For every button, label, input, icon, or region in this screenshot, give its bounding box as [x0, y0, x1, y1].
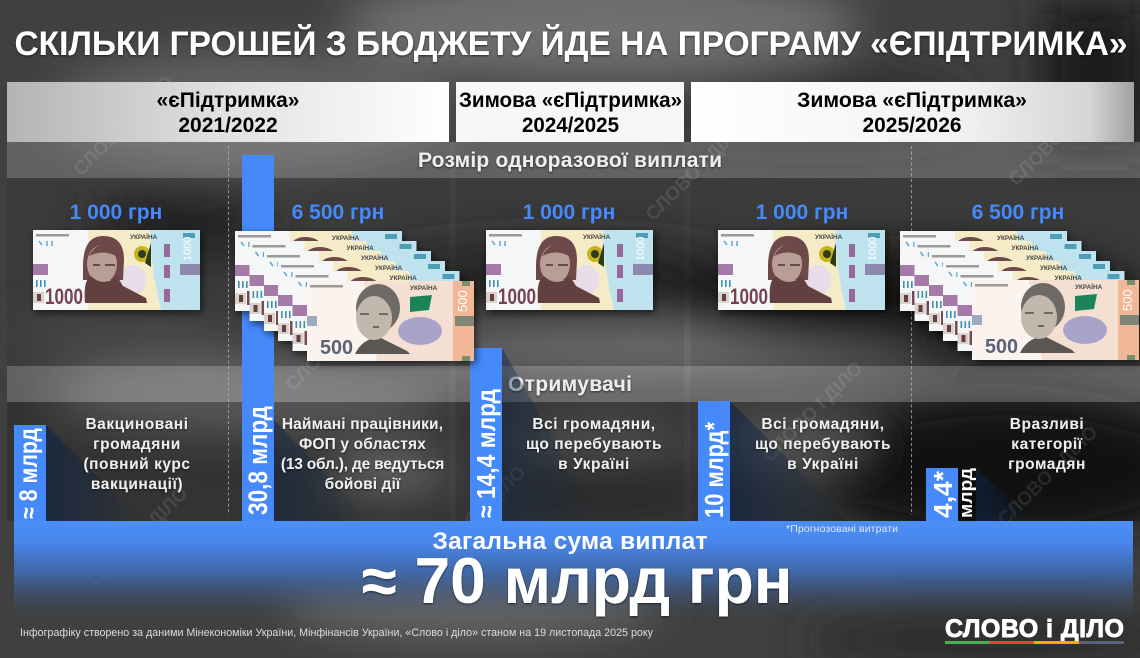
banknote: 1000 (2021): 1000	[182, 237, 194, 261]
recipients text: employees: бойові дії	[325, 476, 401, 493]
bar: 4,4 млрд	[926, 467, 976, 522]
banknote stack: 6500 (2021): УКРАЇНА	[346, 244, 374, 252]
band label: payment size: Розмір одноразової виплати	[418, 149, 722, 172]
recipients text: employees: (13 обл.), де ведуться	[281, 456, 444, 473]
banknote: 1000 (2025): УКРАЇНА	[815, 233, 843, 241]
bar: 10 млрд: 10 млрд*	[699, 421, 729, 518]
recipients text: vulnerable: Вразливі	[1010, 416, 1084, 433]
bar: 14,4 млрд: ≈ 14,4 млрд	[471, 389, 501, 518]
banknote: 1000 (2025)	[718, 230, 885, 310]
banknote: 1000 (2021): УКРАЇНА	[130, 233, 158, 241]
watermarks	[70, 72, 1113, 591]
banknote: 1000 (2021)	[33, 230, 200, 310]
watermarks: СЛОВО І ДІЛО	[642, 117, 750, 225]
banknote stack: 6500 (2025)	[900, 231, 1139, 360]
recipients text: vulnerable: категорії	[1011, 436, 1083, 453]
recipients text: employees: ФОП у областях	[299, 436, 426, 453]
watermarks: СЛОВО І ДІЛО	[1005, 82, 1113, 190]
banknote stack: 6500 (2025): УКРАЇНА	[1054, 274, 1082, 282]
watermarks: СЛОВО І ДІЛО	[422, 462, 530, 570]
header: 2021/2022	[7, 82, 449, 142]
banknote: 1000 (2024): 1000	[498, 284, 536, 309]
bar: 8 млрд: ≈ 8 млрд	[15, 428, 43, 519]
banknote stack: 6500 (2021): 500	[320, 337, 353, 359]
watermarks: СЛОВО І ДІЛО	[282, 287, 390, 395]
recipients text: vaccinated: громадяни	[93, 436, 181, 453]
banknote stack: 6500 (2025): 500	[1120, 289, 1135, 311]
banknote stack: 6500 (2021): 500	[455, 290, 470, 312]
logo: СЛОВО і ДІЛО	[945, 615, 1124, 643]
amount labels	[70, 201, 1064, 224]
banknote stack: 6500 (2021): УКРАЇНА	[390, 274, 417, 282]
recipients text: all citizens 2024: в Україні	[558, 456, 630, 473]
amount labels: 1 000 грн	[70, 201, 162, 224]
banknote: 1000 (2025): 1000	[867, 237, 879, 261]
header: 2025/2026: 2025/2026	[862, 114, 962, 137]
header: 2024/2025: Зимова «єПідтримка»	[459, 89, 682, 112]
band label: recipients: Отримувачі	[508, 373, 632, 396]
header: 2024/2025: 2024/2025	[522, 114, 619, 137]
banknote stack: 6500 (2025): УКРАЇНА	[1012, 244, 1039, 252]
total value: ≈ 70 млрд грн	[362, 544, 792, 617]
recipients text: vaccinated: вакцинації)	[91, 476, 183, 493]
recipients text: all citizens 2025: в Україні	[787, 456, 859, 473]
bar: 30,8 млрд: 30,8 млрд	[243, 406, 273, 515]
bar: 4,4 млрд: млрд	[956, 467, 976, 518]
recipients text: all citizens 2024: Всі громадяни,	[532, 416, 656, 433]
total label: Загальна сума виплат	[432, 528, 708, 555]
header: 2021/2022: 2021/2022	[178, 114, 278, 137]
banknote stack: 6500 (2025): УКРАЇНА	[1040, 264, 1068, 272]
banknote: 1000 (2024)	[486, 230, 653, 310]
bar: 4,4 млрд: 4,4*	[928, 470, 958, 518]
banknote stack: 6500 (2021): УКРАЇНА	[332, 234, 360, 242]
recipients text: employees: Наймані працівники,	[282, 416, 443, 433]
recipients text: vaccinated	[83, 416, 191, 493]
watermarks: СЛОВО І ДІЛО	[994, 422, 1102, 530]
recipients text: vaccinated: Вакциновані	[85, 416, 189, 433]
recipients text: all citizens 2024: що перебувають	[526, 436, 662, 453]
banknote stack: 6500 (2025): УКРАЇНА	[997, 234, 1025, 242]
banknote: 1000 (2024): УКРАЇНА	[583, 233, 611, 241]
banknote stack: 6500 (2021): УКРАЇНА	[361, 254, 389, 262]
recipients text: vulnerable	[1008, 416, 1086, 473]
recipients text: vulnerable: громадян	[1008, 456, 1086, 473]
banknote: 1000 (2021): 1000	[45, 284, 83, 309]
banknote stack: 6500 (2025): УКРАЇНА	[1075, 283, 1103, 291]
recipients text: all citizens 2025: Всі громадяни,	[761, 416, 885, 433]
total panel	[14, 521, 1133, 618]
recipients text: all citizens 2025	[755, 416, 891, 473]
banknote: 1000 (2025): 1000	[730, 284, 768, 309]
banknote stack: 6500 (2021): УКРАЇНА	[410, 284, 438, 292]
watermarks: СЛОВО І ДІЛО	[759, 358, 867, 466]
banknote stack: 6500 (2025): 500	[985, 336, 1018, 358]
amount labels: 6 500 грн	[972, 201, 1064, 224]
bar shadows	[46, 348, 1030, 521]
amount labels: 6 500 грн	[292, 201, 384, 224]
amount labels: 1 000 грн	[523, 201, 615, 224]
recipients text: all citizens 2024	[526, 416, 662, 473]
dashed column dividers	[228, 146, 912, 515]
title: СКІЛЬКИ ГРОШЕЙ З БЮДЖЕТУ ЙДЕ НА ПРОГРАМУ «ЄПІДТРИМКА»	[14, 24, 1128, 63]
banknote stack: 6500 (2025): УКРАЇНА	[1026, 254, 1054, 262]
overlay: dark rows and light bands	[7, 142, 1140, 521]
watermarks: СЛОВО І ДІЛО	[84, 483, 192, 591]
header: 2025/2026: Зимова «єПідтримка»	[797, 89, 1027, 112]
banknote: 1000 (2024): 1000	[635, 237, 647, 261]
recipients text: all citizens 2025: що перебувають	[755, 436, 891, 453]
banknote stack: 6500 (2021)	[235, 231, 474, 361]
watermarks: СЛОВО І ДІЛО	[70, 72, 178, 180]
header: 2021/2022: «єПідтримка»	[157, 89, 299, 112]
bar: 30,8 млрд	[242, 155, 274, 522]
header: 2025/2026	[691, 82, 1134, 142]
source note: Інфографіку створено за даними Мінекономіки України, Мінфінансів України, «Слово і діло» станом на 19 листопада 2025 року	[20, 627, 653, 639]
amount labels: 1 000 грн	[756, 201, 848, 224]
recipients text: vaccinated: (повний курс	[83, 456, 191, 473]
recipients text: employees	[281, 416, 444, 493]
footnote: forecast: *Прогнозовані витрати	[786, 523, 898, 535]
header: 2024/2025	[456, 82, 684, 142]
banknote stack: 6500 (2021): УКРАЇНА	[375, 264, 403, 272]
